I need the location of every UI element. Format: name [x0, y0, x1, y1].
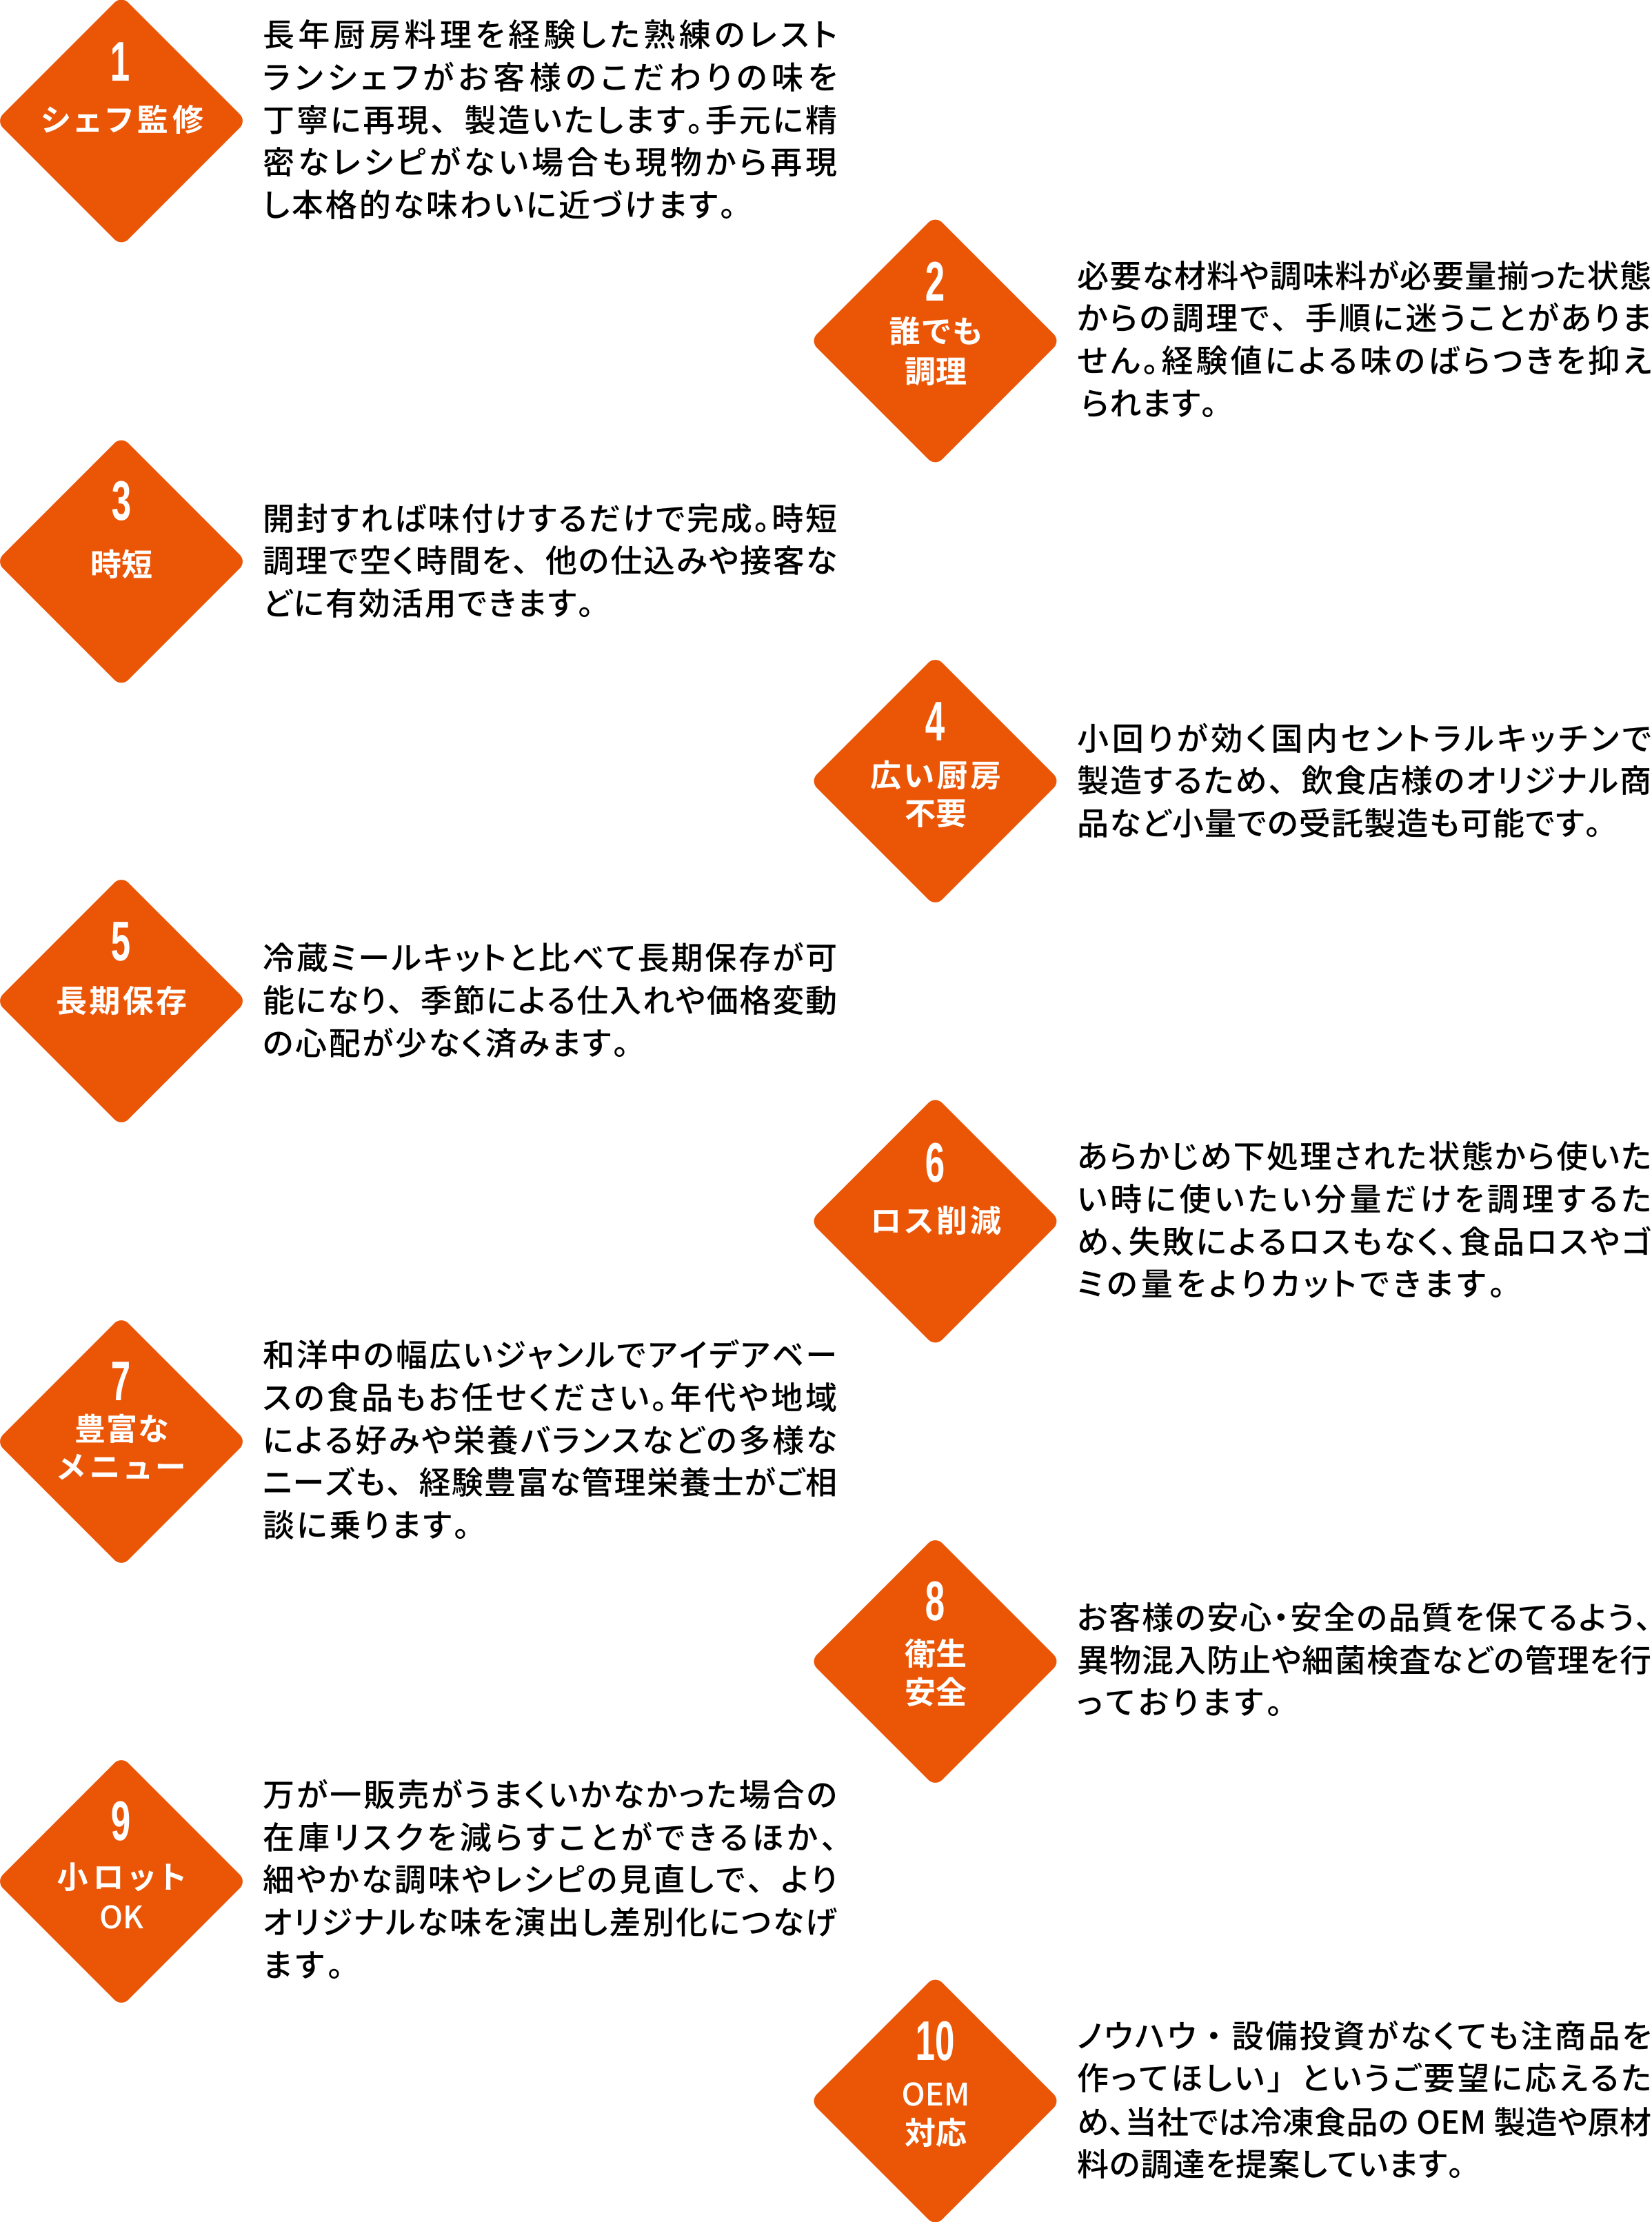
- text: 5: 能になり、季節による仕入れや価格変動: [263, 976, 837, 1022]
- panel: 3 time saving: [0, 436, 837, 687]
- badge: 4: 4: [925, 691, 945, 753]
- badge: 3: 時短: [90, 540, 152, 585]
- badge: 7: [0, 1316, 247, 1567]
- panel: 8 hygiene and safety: [810, 1536, 1651, 1787]
- text: 1: 長年厨房料理を経験した熟練のレスト: [263, 10, 837, 56]
- badge: 5: [0, 876, 247, 1127]
- text: 8: っております。: [1077, 1678, 1282, 1724]
- text: 8: お客様の安心・安全の品質を保てるよう、: [1077, 1593, 1651, 1639]
- text: 5: 冷蔵ミールキットと比べて長期保存が可: [263, 933, 837, 979]
- text: 4: 品など小量での受託製造も可能です。: [1077, 799, 1601, 845]
- text: 1: し本格的な味わいに近づけます。: [263, 181, 736, 226]
- badge: 6: 6: [925, 1132, 945, 1194]
- text: 5: [263, 933, 837, 1064]
- badge: 1: 1: [110, 31, 130, 93]
- badge: 4: 不要: [905, 789, 967, 834]
- badge: 2: 調理: [905, 347, 967, 392]
- badge: 7: 7: [111, 1351, 130, 1413]
- badge: 2: 2: [925, 251, 945, 313]
- panel: 6 loss reduction: [810, 1096, 1651, 1346]
- panel: 7 rich menu: [0, 1316, 837, 1567]
- badge: 1: シェフ監修: [41, 95, 203, 140]
- badge: 8: 8: [925, 1570, 945, 1633]
- panel: 4 no large kitchen: [810, 656, 1651, 907]
- text: 7: ニーズも、経験豊富な管理栄養士がご相: [263, 1458, 837, 1504]
- text: 1: [263, 10, 837, 226]
- badge: 1: [0, 0, 247, 246]
- text: 2: られます。: [1081, 379, 1217, 425]
- text: 3: どに有効活用できます。: [263, 579, 594, 625]
- text: 9: 在庫リスクを減らすことができるほか、: [263, 1813, 837, 1859]
- panel: 5 long-term storage: [0, 876, 837, 1127]
- badge: 2: [810, 216, 1060, 466]
- text: 6: あらかじめ下処理された状態から使いた: [1077, 1132, 1651, 1178]
- badge: 8: [810, 1536, 1060, 1787]
- text: 8: 異物混入防止や細菌検査などの管理を行: [1077, 1636, 1651, 1681]
- badge: 8: 安全: [905, 1668, 967, 1713]
- badge: 5: 長期保存: [56, 976, 187, 1021]
- text: 10: め、当社では冷凍食品の OEM 製造や原材: [1077, 2098, 1651, 2143]
- panel: 2 anyone can cook: [810, 216, 1651, 466]
- badge: 4: [810, 656, 1060, 907]
- badge: 10: [810, 1976, 1060, 2222]
- badge: 4: 広い厨房: [870, 751, 1001, 796]
- text: 7: スの食品もお任せください。年代や地域: [263, 1373, 837, 1419]
- text: 2: からの調理で、手順に迷うことがありま: [1077, 294, 1651, 339]
- text: 7: [263, 1331, 837, 1546]
- text: 6: [1077, 1132, 1651, 1305]
- text: 3: [263, 494, 837, 625]
- badge: 7: メニュー: [57, 1442, 185, 1487]
- text: 10: [1077, 2012, 1651, 2185]
- badge: 10: OEM: [902, 2070, 969, 2114]
- text: 4: 製造するため、飲食店様のオリジナル商: [1077, 756, 1651, 802]
- badge: 6: [810, 1096, 1060, 1346]
- text: 9: [263, 1770, 838, 1986]
- badge: 10: 対応: [905, 2108, 967, 2153]
- text: 2: [1077, 252, 1651, 425]
- badge: 8: 衛生: [905, 1629, 967, 1674]
- text: 9: オリジナルな味を演出し差別化につなげ: [263, 1898, 838, 1943]
- text: 7: 談に乗ります。: [263, 1501, 470, 1546]
- badge: 7: 豊富な: [74, 1404, 168, 1449]
- text: 4: [1077, 714, 1651, 845]
- badge: 6: ロス削減: [870, 1196, 1001, 1241]
- text: 10: ノウハウ・設備投資がなくても注商品を: [1077, 2012, 1651, 2057]
- text: 3: 調理で空く時間を、他の仕込みや接客な: [263, 536, 837, 582]
- text: 6: ミの量をよりカットできます。: [1077, 1260, 1505, 1305]
- badge: 2: 誰でも: [889, 307, 982, 352]
- badge: 9: 小ロット: [57, 1852, 186, 1897]
- text: 3: 開封すれば味付けするだけで完成。時短: [263, 494, 837, 540]
- panel: 9 small lot ok: [0, 1756, 838, 2007]
- badge: 10: 10: [916, 2010, 954, 2072]
- badge: 9: 9: [111, 1790, 130, 1852]
- text: 7: 和洋中の幅広いジャンルでアイデアベー: [263, 1331, 837, 1376]
- text: 9: 細やかな調味やレシピの見直しで、より: [263, 1855, 837, 1901]
- badge: 3: [0, 436, 247, 687]
- text: 6: い時に使いたい分量だけを調理するた: [1077, 1175, 1651, 1220]
- text: 5: の心配が少なく済みます。: [263, 1019, 629, 1064]
- text: 2: せん。経験値による味のばらつきを抑え: [1077, 336, 1651, 382]
- badge: 9: OK: [99, 1892, 143, 1937]
- text: 1: 密なレシピがない場合も現物から再現: [263, 138, 837, 183]
- text: 1: ランシェフがお客様のこだわりの味を: [263, 53, 837, 99]
- panel: 10 OEM support: [810, 1976, 1651, 2222]
- badge: 5: 5: [111, 911, 130, 973]
- text: 9: ます。: [263, 1941, 343, 1986]
- panel: 1 chef supervision: [0, 0, 837, 246]
- text: 1: 丁寧に再現、製造いたします。手元に精: [263, 96, 837, 141]
- text: 8: [1077, 1593, 1651, 1724]
- text: 2: 必要な材料や調味料が必要量揃った状態: [1077, 252, 1651, 297]
- text: 10: 料の調達を提案しています。: [1077, 2140, 1464, 2185]
- text: 4: 小回りが効く国内セントラルキッチンで: [1077, 714, 1651, 760]
- text: 10: 作ってほしい」というご要望に応えるた: [1077, 2054, 1651, 2099]
- text: 9: 万が一販売がうまくいかなかった場合の: [263, 1770, 837, 1816]
- text: 6: め、失敗によるロスもなく、食品ロスやゴ: [1077, 1218, 1651, 1263]
- text: 7: による好みや栄養バランスなどの多様な: [263, 1416, 837, 1462]
- badge: 3: 3: [112, 470, 131, 532]
- badge: 9: [0, 1756, 247, 2007]
